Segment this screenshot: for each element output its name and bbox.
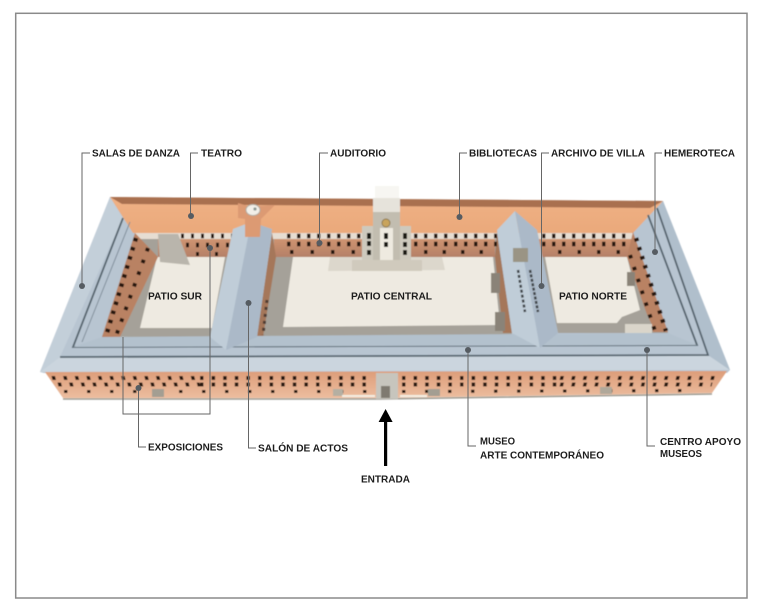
roof: dark ridge lines [60,208,708,357]
callout: centro apoyo museos: CENTRO APOYO [660,437,741,448]
callout: museo arte contemporaneo: ARTE CONTEMPORÁNEO [480,448,604,462]
callout: archivo de villa [538,148,645,289]
callout: centro apoyo museos [644,347,741,460]
roof: perimeter base [40,197,730,373]
callout: bibliotecas: BIBLIOTECAS [469,148,537,160]
roof: back wing in orange [110,197,663,233]
callout: salon de actos: SALÓN DE ACTOS [258,442,348,454]
patio labels: PATIO CENTRAL [351,292,432,302]
front facade [45,371,727,399]
courtyard: patio central [257,233,512,337]
callout: teatro [188,148,242,219]
callout: archivo de villa: ARCHIVO DE VILLA [551,148,645,160]
patio labels: PATIO SUR [148,292,203,302]
callout: museo arte contemporaneo: MUSEO [480,436,515,448]
roof: outer slopes [40,197,730,372]
label: entrada: ENTRADA [361,474,410,486]
patio labels: PATIO NORTE [559,292,627,302]
building illustration [40,186,730,399]
all text labels and leaders [79,148,741,486]
courtyard: patio sur [102,233,233,337]
entrance portal [376,373,398,399]
roof: transverse wing sur [210,222,272,350]
arrow: entrance [379,409,393,466]
callout: salas de danza [79,148,180,289]
callout: hemeroteca [652,148,735,255]
callout: auditorio [316,148,386,246]
callout: hemeroteca: HEMEROTECA [664,148,735,160]
callout: exposiciones: EXPOSICIONES [148,442,223,454]
callout: museo arte contemporaneo [465,347,604,462]
roof: transverse wing norte [497,211,558,348]
callout: salon de actos [246,300,348,454]
theatre dome [238,203,275,237]
roof: front wing inner band [73,333,697,347]
patio labels [148,292,627,302]
callout: bibliotecas [456,148,537,220]
central tower [352,186,422,271]
callout: auditorio: AUDITORIO [330,148,386,160]
callout: centro apoyo museos: MUSEOS [660,449,702,460]
callout: exposiciones [123,245,223,454]
callout: teatro: TEATRO [201,148,242,160]
courtyard: patio norte [537,232,668,333]
callout: salas de danza: SALAS DE DANZA [92,148,180,160]
